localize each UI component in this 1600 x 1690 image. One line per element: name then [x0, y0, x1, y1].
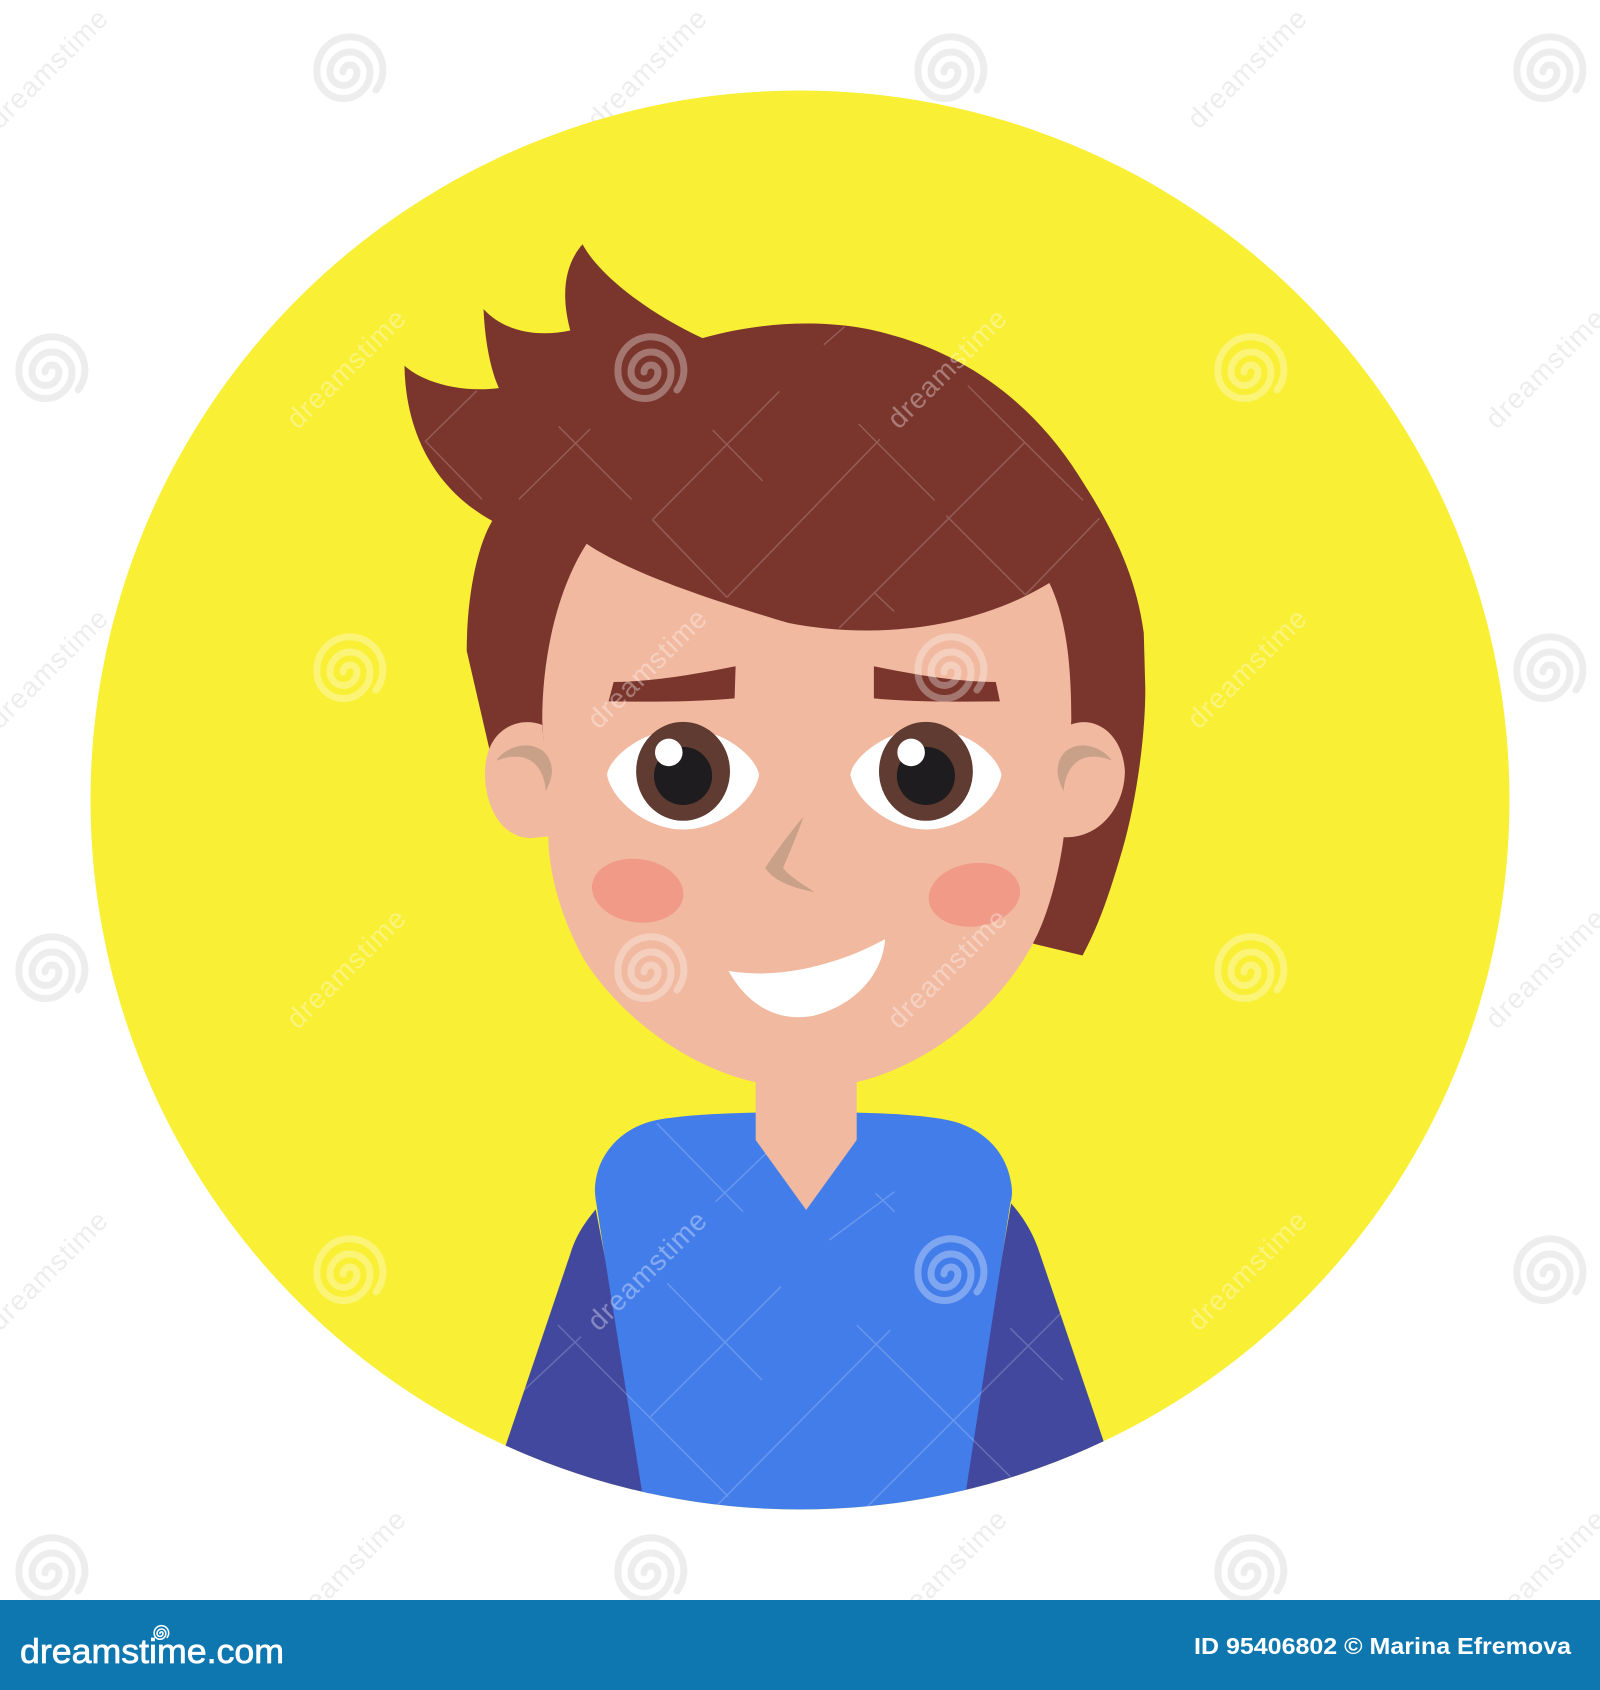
watermarks over the artwork: dreamstime [581, 602, 713, 734]
neck [756, 1082, 857, 1210]
nose [765, 817, 815, 892]
smile [728, 939, 885, 1017]
footer logo: dreamstime.com [20, 1633, 284, 1671]
right ear [1063, 722, 1125, 837]
watermarks over the artwork: dreamstime [280, 902, 412, 1034]
clothing [506, 1082, 1104, 1510]
character: boy [404, 244, 1145, 1550]
left eye [607, 722, 759, 829]
watermarks over the artwork: dreamstime [881, 302, 1013, 434]
watermarks on white background: dreamstime [280, 1503, 412, 1635]
yellow circle background [90, 90, 1510, 1510]
image id and credit: ID 95406802 © Marina Efremova [1194, 1633, 1571, 1659]
watermarks over the artwork: dreamstime [1181, 1204, 1313, 1336]
watermarks on white background: dreamstime [1181, 2, 1313, 134]
left eyebrow [609, 666, 736, 702]
right eyebrow [874, 666, 1000, 702]
footer bar [0, 1600, 1600, 1690]
right eye [850, 722, 1001, 829]
left sleeve [506, 1210, 650, 1494]
face [542, 544, 1071, 1082]
right cheek [928, 863, 1020, 927]
watermarks on white background: dreamstime [581, 2, 713, 134]
watermarks over the artwork [280, 302, 1313, 1336]
watermarks over the artwork: dreamstime [581, 1204, 713, 1336]
left cheek [592, 858, 684, 922]
watermarks on white background: dreamstime [881, 1503, 1013, 1635]
left inner ear [496, 745, 552, 791]
watermarks over the artwork: dreamstime [280, 302, 412, 434]
watermarks over the artwork: dreamstime [1181, 602, 1313, 734]
right inner ear [1058, 745, 1112, 791]
hair [404, 244, 1145, 956]
left ear [485, 722, 551, 838]
right sleeve [962, 1204, 1104, 1491]
watermarks over the artwork: dreamstime [881, 902, 1013, 1034]
shirt torso [595, 1113, 1012, 1550]
head [404, 244, 1145, 1082]
